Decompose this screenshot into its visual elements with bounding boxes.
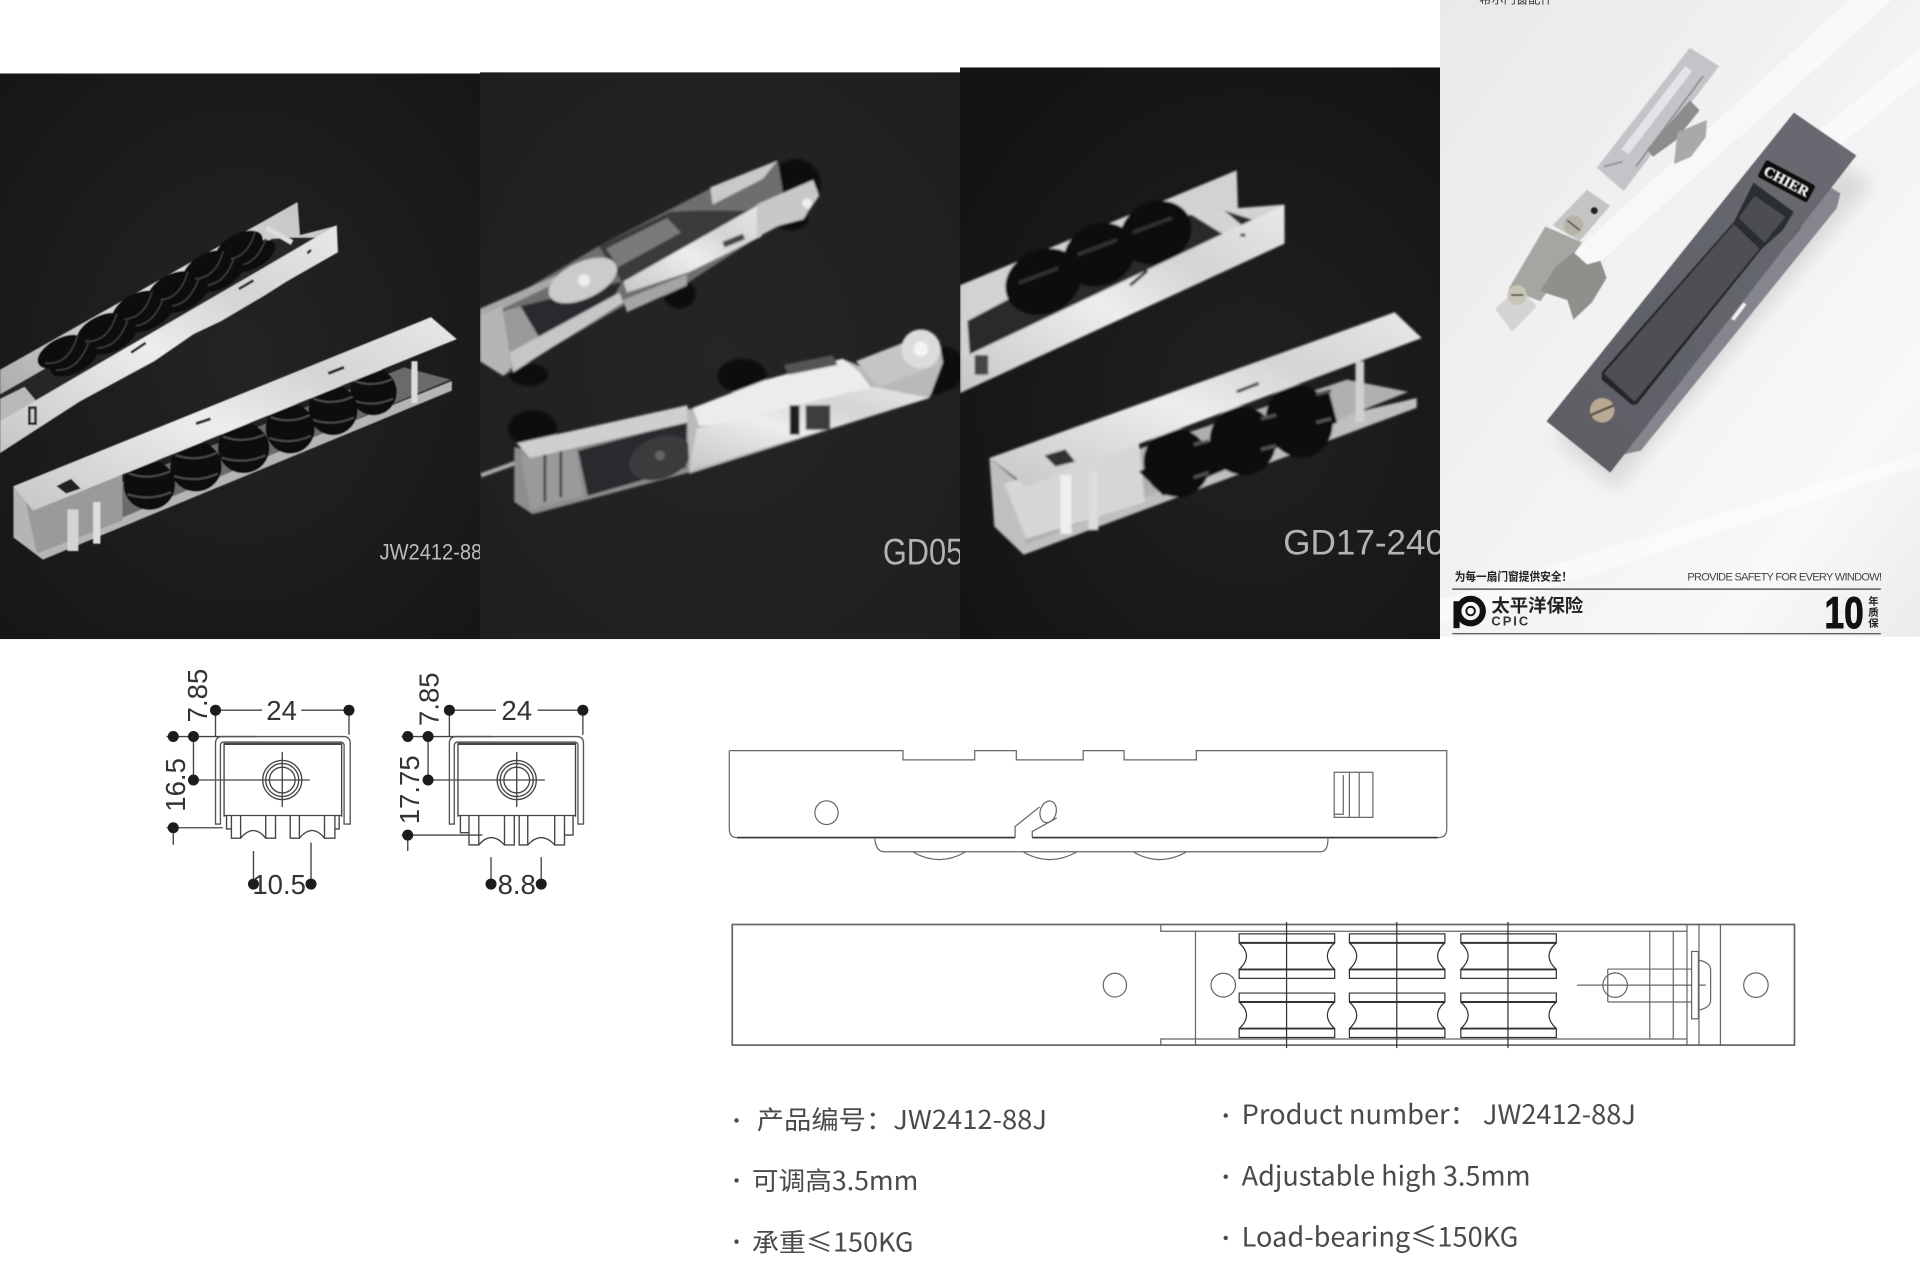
lower roller rail <box>13 317 457 560</box>
badge: 10 year warranty: 保 <box>1868 615 1879 630</box>
spec list: English: Load-bearing≤150KG <box>1242 1216 1518 1255</box>
lower roller rail <box>989 312 1422 555</box>
slogan: English: PROVIDE SAFETY FOR EVERY WINDOW! <box>1687 571 1882 583</box>
end-section drawing: 17.75 profile: 7.85 <box>413 672 444 726</box>
end-section drawing: 16.5 profile: 16.5 <box>160 758 191 812</box>
badge: 10 year warranty: 年 <box>1868 593 1879 608</box>
label: JW2412-88J: JW2412-88J <box>380 540 492 565</box>
roller set <box>1239 934 1556 1038</box>
spec list: Chinese <box>734 1100 1047 1259</box>
end-section drawing: 17.75 profile: 8.8 <box>498 869 536 900</box>
spec list: English: Adjustable high 3.5mm <box>1242 1154 1531 1193</box>
technical drawing: side view <box>729 751 1447 860</box>
panel: GD17-2400 roller photo <box>960 67 1464 639</box>
badge: 10 year warranty: 质 <box>1868 604 1879 619</box>
end-section drawing: 16.5 profile: 10.5 <box>252 869 306 900</box>
panel: CHIER window latch advert <box>1440 0 1920 638</box>
icon: lower keeper bracket <box>1495 190 1610 332</box>
panel: GD05 roller photo <box>480 72 973 639</box>
label: GD17-2400: GD17-2400 <box>1283 523 1464 563</box>
logo badge: CHIER: CHIER <box>1761 163 1812 201</box>
logo: CPIC Pacific Insurance <box>1453 592 1584 629</box>
spec list: English <box>1224 1093 1636 1255</box>
spec list: Chinese: 产品编号：JW2412-88J <box>757 1100 1047 1137</box>
spec list: Chinese: 承重≤150KG <box>752 1222 913 1259</box>
panel: JW2412-88J roller photo <box>0 73 492 639</box>
badge: 10 year warranty: 10 <box>1824 589 1864 638</box>
icon: upper keeper bracket <box>1597 48 1719 191</box>
end-section drawing: 17.75 profile: 17.75 <box>394 755 425 824</box>
upper roller rail <box>960 170 1284 393</box>
slogan: Chinese: 为每一扇门窗提供安全！ <box>1455 568 1572 584</box>
end-section drawing: 16.5 profile <box>160 669 354 900</box>
latch shadow <box>1555 147 1873 490</box>
end-section drawing: 16.5 profile: 24 <box>266 695 297 726</box>
lower pivot roller <box>480 329 965 514</box>
logo: CPIC Pacific Insurance: CPIC <box>1491 614 1528 629</box>
end-section drawing: 17.75 profile <box>394 672 588 900</box>
spec list: English: Product number： JW2412-88J <box>1242 1093 1636 1132</box>
technical drawing: top view <box>732 922 1794 1048</box>
label: GD05: GD05- <box>883 531 973 572</box>
badge: 10 year warranty <box>1826 596 1878 629</box>
logo: CPIC Pacific Insurance: 太平洋保险 <box>1491 592 1584 618</box>
end-section drawing: 16.5 profile: 7.85 <box>182 669 213 722</box>
spec list: Chinese: 可调高3.5mm <box>752 1161 918 1198</box>
upper pivot roller <box>480 159 820 386</box>
icon: grey flush latch <box>1547 113 1856 473</box>
end-section drawing: 17.75 profile: 24 <box>501 695 532 726</box>
upper roller rail <box>0 202 338 453</box>
